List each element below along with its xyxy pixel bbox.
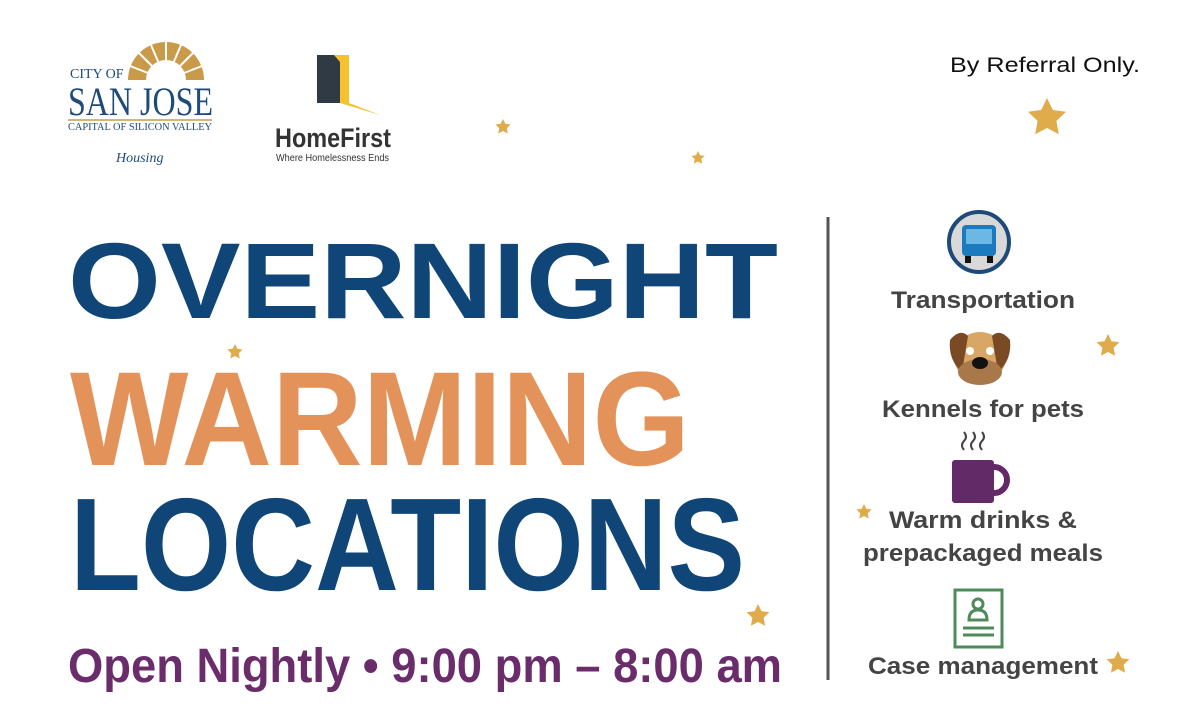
title: overnight: OVERNIGHT [68, 220, 778, 341]
logo: City of San Jose: CAPITAL OF SILICON VALLEY [68, 121, 212, 133]
icon: mug [952, 432, 1007, 503]
title: locations: LOCATIONS [70, 471, 745, 618]
text: by referral only: By Referral Only. [950, 54, 1140, 77]
label: transportation: Transportation [891, 287, 1075, 314]
logo: HomeFirst: Where Homelessness Ends [276, 153, 389, 164]
logo: City of San Jose: Housing [115, 151, 163, 166]
logo: HomeFirst [275, 55, 391, 164]
text: prepackaged meals [863, 540, 1103, 567]
logo: City of San Jose: SAN JOSE [68, 79, 213, 124]
label: kennels: Kennels for pets [882, 396, 1084, 423]
logo: City of San Jose [68, 42, 213, 166]
subtitle: hours: Open Nightly • 9:00 pm – 8:00 am [68, 640, 782, 693]
label: case management: Case management [868, 653, 1098, 680]
title: warming: WARMING [70, 345, 690, 494]
label: warm drinks: Warm drinks & [889, 507, 1077, 534]
logo: HomeFirst: HomeFirst [275, 123, 391, 153]
icon: bus [949, 212, 1009, 272]
icon: dog [950, 332, 1010, 385]
decorative stars [227, 98, 1129, 673]
logo: City of San Jose: CITY OF [70, 67, 124, 82]
divider [826, 217, 830, 680]
icon: case file [955, 590, 1002, 647]
